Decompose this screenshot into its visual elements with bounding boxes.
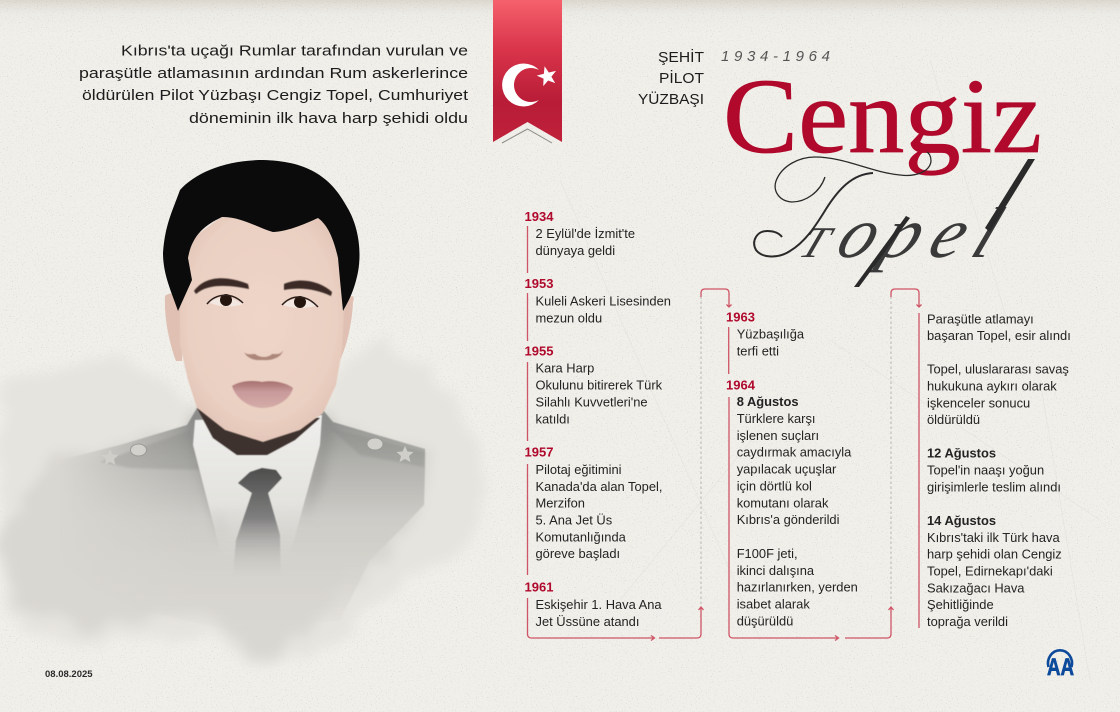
rank label: ŞEHİT [658, 48, 704, 66]
1955: 1955 [524, 344, 553, 359]
1955 [524, 344, 663, 441]
timeline column 3: işkenceler sonucu [927, 395, 1030, 410]
1961: 1961 [524, 580, 553, 595]
1953: 1953 [524, 276, 553, 291]
1961 [524, 580, 662, 629]
1957: Merzifon [536, 496, 585, 511]
1964: F100F jeti, [737, 546, 798, 561]
name: Topel: e [918, 194, 983, 273]
connector arrow column 2 to 3 [729, 289, 922, 640]
name: Cengiz: Cengiz [723, 58, 1042, 176]
1955: katıldı [536, 411, 570, 426]
timeline column 3: başaran Topel, esir alındı [927, 328, 1071, 343]
eyes [207, 294, 318, 308]
timeline column 3: harp şehidi olan Cengiz [927, 547, 1062, 562]
intro text: Kıbrıs'ta uçağı Rumlar tarafından vurulan ve [121, 42, 468, 60]
1953: Kuleli Askeri Lisesinden [536, 294, 671, 308]
1957: göreve başladı [536, 546, 620, 561]
1957: 5. Ana Jet Üs [536, 512, 612, 528]
1957: Kanada'da alan Topel, [536, 479, 662, 494]
outer ink wash [0, 340, 490, 668]
1964: için dörtlü kol [737, 478, 812, 493]
timeline column 3: Paraşütle atlamayı [927, 311, 1034, 326]
1964: Türklere karşı [737, 411, 815, 426]
name: Topel: l [961, 194, 1014, 273]
date: 08.08.2025 [45, 669, 93, 680]
intro text: döneminin ilk hava harp şehidi oldu [189, 110, 468, 127]
1934: 1934 [524, 209, 554, 224]
neck shadow [197, 408, 320, 455]
1961: Jet Üssüne atandı [536, 614, 639, 629]
1963: 1963 [726, 310, 755, 325]
lapel shadow [188, 408, 334, 540]
name: Topel: T [793, 218, 841, 267]
rank label: PİLOT [659, 69, 704, 87]
timeline column 3: 12 Ağustos [927, 446, 996, 461]
connector arrow column 1 to 2 [528, 289, 732, 640]
1964: isabet alarak [737, 596, 810, 611]
1961: Eskişehir 1. Hava Ana [536, 597, 662, 612]
timeline column 3: Kıbrıs'taki ilk Türk hava [927, 530, 1060, 545]
hair [163, 160, 360, 311]
name: Topel: p [866, 194, 939, 273]
shoulder straps and stars [100, 428, 425, 470]
life years: 1934-1964 [721, 48, 830, 65]
tie [232, 468, 282, 585]
intro text [79, 42, 469, 127]
rank label: YÜZBAŞI [638, 90, 704, 108]
timeline column 1 [524, 209, 671, 629]
lips [232, 381, 293, 408]
timeline column 3: 14 Ağustos [927, 513, 996, 528]
timeline column 3: Topel'in naaşı yoğun [927, 463, 1044, 478]
1964: işlenen suçları [737, 428, 819, 443]
timeline column 3: girişimlerle teslim alındı [927, 479, 1061, 494]
brows [194, 278, 332, 296]
rank label [638, 48, 704, 108]
portrait: officer with smoke wash [0, 160, 490, 668]
1934 [524, 209, 635, 273]
1955: Silahlı Kuvvetleri'ne [536, 394, 648, 409]
timeline column 3 [919, 311, 1071, 629]
1957: 1957 [524, 445, 553, 460]
timeline column 3: Sakızağacı Hava [927, 580, 1025, 595]
1964: komutanı olarak [737, 495, 829, 510]
name: Topel: o [826, 194, 895, 273]
1955: Kara Harp [536, 361, 594, 376]
timeline column 3: hukukuna aykırı olarak [927, 378, 1057, 394]
1964: yapılacak uçuşlar [737, 462, 837, 477]
1957: Pilotaj eğitimini [536, 462, 621, 477]
1964: ikinci dalışına [737, 563, 815, 578]
intro text: paraşütle atlamasının ardından Rum askerlerince [79, 65, 468, 82]
1957: Komutanlığında [536, 529, 627, 544]
ribbon with crescent and star [493, 0, 562, 143]
timeline column 3: Şehitliğinde [927, 597, 994, 612]
1957 [524, 445, 662, 575]
uniform jacket [78, 408, 426, 600]
1964: 1964 [726, 377, 756, 392]
shirt [193, 415, 322, 570]
1953 [524, 276, 671, 341]
timeline column 3: toprağa verildi [927, 614, 1008, 629]
inner ink wash [5, 430, 428, 655]
1964: Kıbrıs'a gönderildi [737, 512, 839, 527]
1964: hazırlanırken, yerden [737, 580, 858, 595]
timeline column 3: öldürüldü [927, 412, 980, 427]
1963 [726, 310, 805, 374]
nose [243, 350, 283, 360]
1964: caydırmak amacıyla [737, 445, 852, 460]
timeline column 3: Topel, Edirnekapı'daki [927, 564, 1053, 578]
intro text: öldürülen Pilot Yüzbaşı Cengiz Topel, Cumhuriyet [82, 87, 469, 104]
logo: AA: AA [1047, 654, 1074, 681]
1955: Okulunu bitirerek Türk [536, 378, 663, 392]
1964 [726, 377, 858, 628]
1964: 8 Ağustos [737, 394, 799, 409]
1953: mezun oldu [536, 310, 602, 325]
face [180, 214, 344, 442]
timeline column 3: Topel, uluslararası savaş [927, 362, 1069, 377]
1963: terfi etti [737, 344, 779, 358]
name: Topel [754, 152, 1035, 287]
1934: 2 Eylül'de İzmit'te [536, 226, 635, 241]
1964: düşürüldü [737, 613, 793, 628]
ears [165, 294, 354, 361]
timeline column 2 [726, 310, 858, 628]
1963: Yüzbaşılığa [737, 327, 805, 342]
1934: dünyaya geldi [536, 243, 615, 258]
